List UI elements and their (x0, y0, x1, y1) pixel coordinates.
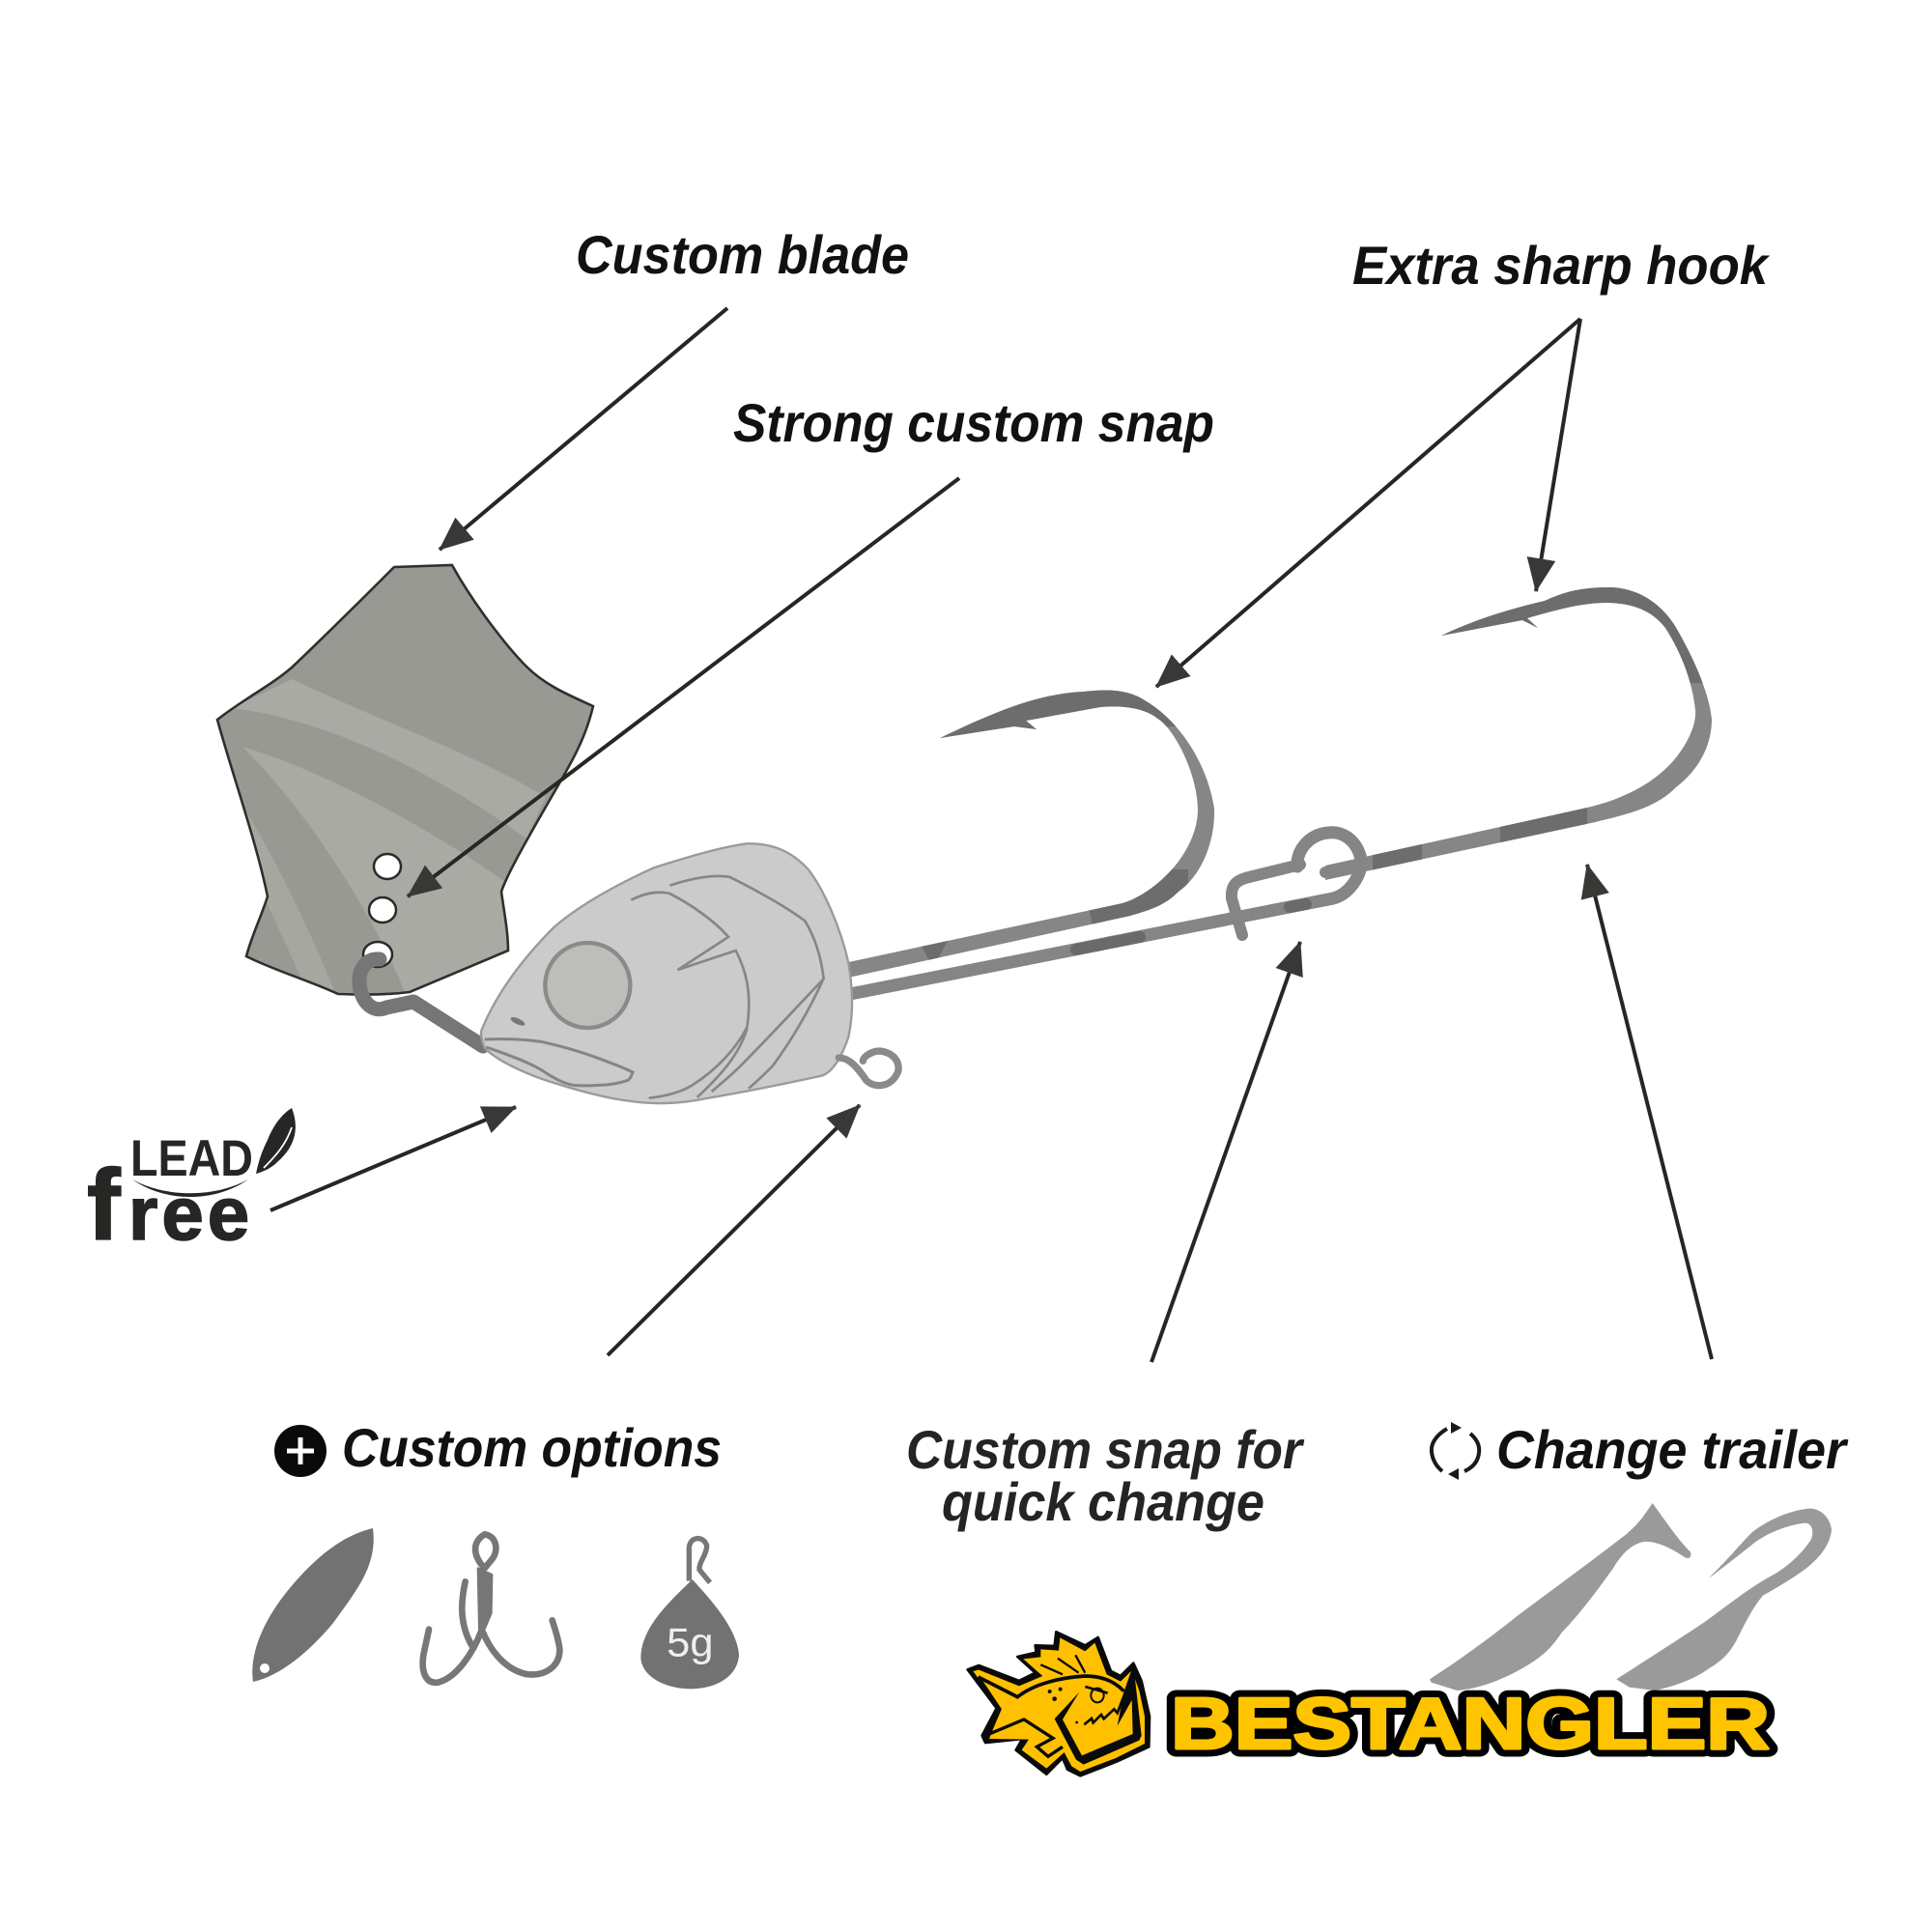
heading: Custom snap for quick change: quick change (942, 1471, 1264, 1532)
icon: paddle tail trailer (1430, 1503, 1690, 1690)
mouth (485, 1039, 633, 1086)
arrow: change trailer (1587, 865, 1712, 1359)
heading: Custom snap for quick change (906, 1419, 1305, 1532)
eye (545, 943, 630, 1028)
arrow: lead free (270, 1107, 516, 1210)
blade holes (363, 854, 401, 967)
lower shank and quick-change snap (840, 833, 1361, 996)
head snap wire to blade (359, 959, 483, 1046)
hook 1 (849, 690, 1215, 978)
heading: Custom blade: Custom blade (576, 224, 909, 285)
icon: change arrows (1432, 1422, 1479, 1480)
rear ring eye (838, 1051, 898, 1086)
heading: Extra sharp hook: Extra sharp hook (1352, 235, 1771, 296)
icon: plus (274, 1425, 327, 1477)
infographic canvas (87, 234, 1849, 1777)
icon: curly tail trailer (1616, 1509, 1832, 1690)
heading: Custom options: Custom options (342, 1417, 722, 1478)
icon: weight: 5g (667, 1619, 713, 1664)
fish head (481, 843, 898, 1103)
lead free badge: LEAD (130, 1130, 253, 1187)
lead free badge (87, 1108, 296, 1262)
blade (217, 565, 593, 1005)
panel: change trailer (1430, 1419, 1849, 1690)
logo: Bestangler (968, 1632, 1770, 1776)
heading: Change trailer: Change trailer (1496, 1419, 1849, 1480)
arrows: extra sharp hook (1156, 319, 1580, 687)
lead free badge: ree (128, 1171, 253, 1256)
nostril (509, 1015, 526, 1027)
heading: Strong custom snap: Strong custom snap (733, 392, 1214, 453)
fish eye (1091, 1689, 1104, 1702)
arrow: strong custom snap (408, 478, 959, 896)
wordmark: BESTANGLER (1171, 1683, 1770, 1764)
icon: spoon (252, 1528, 374, 1682)
gill lines (631, 876, 824, 1098)
icon: leaf (256, 1108, 296, 1174)
icon: piranha (968, 1632, 1150, 1776)
arrow: custom blade (440, 308, 727, 550)
arrow: custom options (608, 1105, 860, 1355)
panel: custom options (252, 1417, 739, 1689)
arrow: quick change snap (1151, 942, 1300, 1362)
icon: weight (640, 1539, 739, 1689)
icon: treble hook (423, 1534, 559, 1683)
hook 2 (1325, 580, 1719, 880)
wordmark: BESTANGLER (1171, 1683, 1770, 1764)
lead free badge: f (87, 1150, 121, 1262)
heading: Custom snap for quick change: Custom snap for (906, 1419, 1305, 1480)
